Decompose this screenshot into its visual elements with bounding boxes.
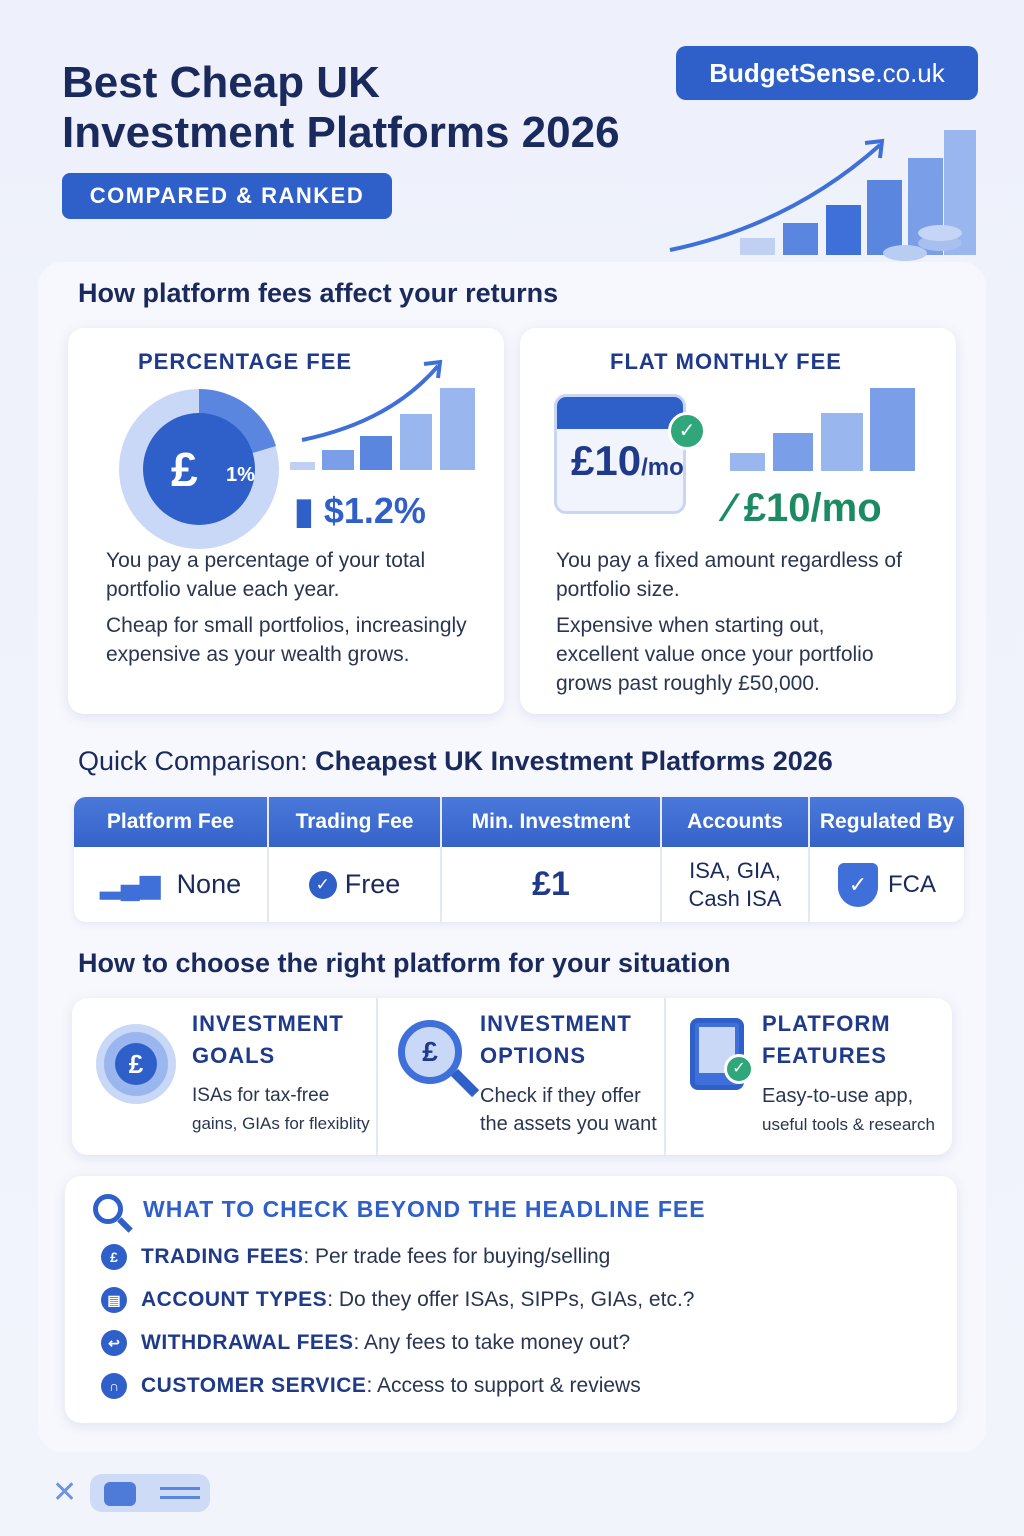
table: comparison: Cash ISA: [689, 886, 781, 910]
list item: withdrawal fees: [101, 1330, 630, 1356]
list item: trading fees: : Per trade fees for buying/selling: [303, 1245, 610, 1268]
list item: trading fees: £: [110, 1249, 118, 1265]
panel: what to check: WHAT TO CHECK BEYOND THE HEADLINE FEE: [143, 1196, 706, 1222]
list item: trading fees: [101, 1244, 610, 1270]
table: comparison: Accounts: [687, 810, 783, 833]
item: platform features: PLATFORM: [762, 1011, 891, 1036]
badge: compared & ranked: [62, 173, 392, 219]
chart: top-right growth bars: [670, 130, 976, 261]
table: comparison: Regulated By: [820, 810, 954, 833]
item: investment goals: [72, 998, 378, 1155]
chart: flat bars: [730, 388, 915, 471]
badge: BudgetSense: .co.uk: [875, 58, 945, 88]
item: platform features: [690, 1011, 935, 1134]
icon: pound donut: [119, 389, 279, 549]
heading: how to choose: How to choose the right platform for your situation: [78, 948, 730, 978]
list item: account types: : Do they offer ISAs, SIPPs, GIAs, etc.?: [327, 1288, 694, 1311]
icon: magnifier: [93, 1194, 123, 1224]
card: flat monthly fee: You pay a fixed amount regardless of portfolio size.: [556, 549, 902, 601]
item: investment options: the assets you want: [480, 1113, 657, 1135]
item: platform features: Easy-to-use app,: [762, 1085, 913, 1107]
card: flat monthly fee: Expensive when starting out, excellent value once your portfolio grows past roughly £50,000.: [556, 614, 874, 695]
list item: customer service: [101, 1373, 641, 1399]
list item: account types: ▤: [107, 1292, 121, 1308]
item: investment options: Check if they offer: [480, 1085, 641, 1107]
panel: choose criteria: [72, 998, 952, 1155]
icon: bottom decorative: [52, 1474, 210, 1512]
list item: customer service: CUSTOMER SERVICE: [141, 1374, 366, 1397]
table: comparison: Trading Fee: [296, 810, 413, 833]
list item: trading fees: TRADING FEES: [141, 1245, 303, 1268]
table: comparison: ▂▄▆: [100, 869, 161, 899]
title: Best Cheap UK: [62, 58, 380, 107]
item: investment options: [378, 998, 666, 1155]
title: [62, 58, 620, 157]
table: comparison: FCA: [888, 870, 936, 898]
item: investment goals: ISAs for tax-free: [192, 1085, 329, 1106]
card: percentage fee: Cheap for small portfolios, increasingly expensive as your wealth grows.: [106, 614, 467, 666]
table: comparison: ✓: [849, 872, 867, 896]
heading: quick comparison: Quick Comparison: Cheapest UK Investment Platforms 2026: [78, 746, 833, 776]
icon: calendar: [554, 394, 686, 514]
item: investment options: £: [422, 1036, 438, 1067]
chart: rising bars: [290, 360, 475, 470]
item: investment goals: INVESTMENT: [192, 1011, 344, 1036]
list item: account types: [101, 1287, 694, 1313]
card: percentage fee: PERCENTAGE FEE: [138, 349, 352, 374]
table: comparison: ✓: [316, 874, 330, 894]
list item: withdrawal fees: WITHDRAWAL FEES: [141, 1331, 353, 1354]
item: platform features: ✓: [732, 1060, 746, 1077]
card: flat monthly fee: ✓: [679, 420, 695, 442]
list item: withdrawal fees: ↩: [108, 1334, 120, 1350]
badge: BudgetSense: [676, 46, 978, 100]
item: investment goals: GOALS: [192, 1043, 275, 1068]
icon: pound donut: 1%: [226, 464, 255, 486]
item: investment goals: £: [129, 1049, 143, 1079]
icon: calendar: £10/mo: [571, 437, 684, 484]
table: comparison: Free: [345, 869, 400, 899]
heading: fees: How platform fees affect your returns: [78, 278, 558, 308]
card: flat monthly fee: ⁄ £10/mo: [726, 486, 882, 530]
item: investment options: INVESTMENT: [480, 1011, 632, 1036]
main panel: [38, 262, 986, 1452]
panel: what to check: [65, 1176, 957, 1423]
badge: compared & ranked: COMPARED & RANKED: [90, 183, 364, 208]
list item: account types: ACCOUNT TYPES: [141, 1288, 327, 1311]
table: comparison: Platform Fee: [107, 810, 234, 833]
card: percentage fee: [68, 328, 504, 714]
table: comparison: None: [177, 869, 241, 899]
item: investment options: OPTIONS: [480, 1043, 586, 1068]
card: percentage fee: You pay a percentage of your total portfolio value each year.: [106, 549, 425, 601]
icon: bottom decorative: ✕: [52, 1476, 77, 1509]
list item: customer service: ∩: [109, 1378, 119, 1394]
list item: withdrawal fees: : Any fees to take money out?: [353, 1331, 630, 1354]
badge: BudgetSense: BudgetSense: [709, 58, 875, 88]
item: investment goals: gains, GIAs for flexiblity: [192, 1114, 370, 1133]
card: flat monthly fee: [520, 328, 956, 714]
card: flat monthly fee: FLAT MONTHLY FEE: [610, 349, 842, 374]
table: comparison: [74, 797, 964, 922]
list item: customer service: : Access to support & reviews: [366, 1374, 641, 1397]
title: Investment Platforms 2026: [62, 108, 620, 157]
icon: pound donut: £: [171, 444, 198, 497]
item: platform features: FEATURES: [762, 1043, 887, 1068]
table: comparison: Min. Investment: [472, 810, 630, 833]
table: comparison: £1: [532, 865, 570, 903]
table: comparison: ISA, GIA,: [689, 858, 781, 882]
card: percentage fee: ▮ $1.2%: [294, 490, 426, 531]
item: platform features: useful tools & research: [762, 1115, 935, 1134]
